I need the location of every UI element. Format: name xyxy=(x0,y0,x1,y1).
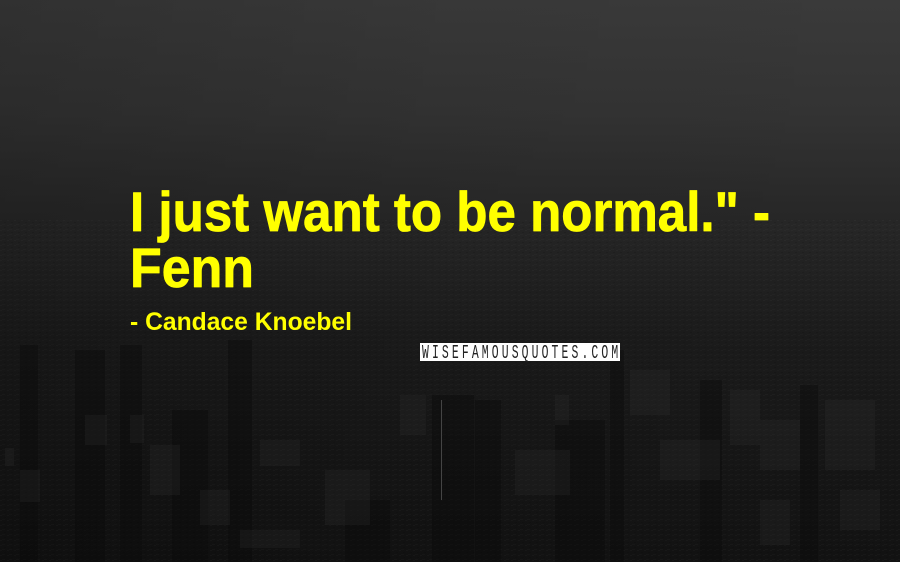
attribution: - Candace Knoebel xyxy=(130,308,352,336)
watermark badge: WISEFAMOUSQUOTES.COM xyxy=(422,342,618,364)
quote line 2: Fenn xyxy=(130,236,254,299)
quote line 1: I just want to be normal." - xyxy=(130,180,770,243)
quote text xyxy=(130,180,770,299)
